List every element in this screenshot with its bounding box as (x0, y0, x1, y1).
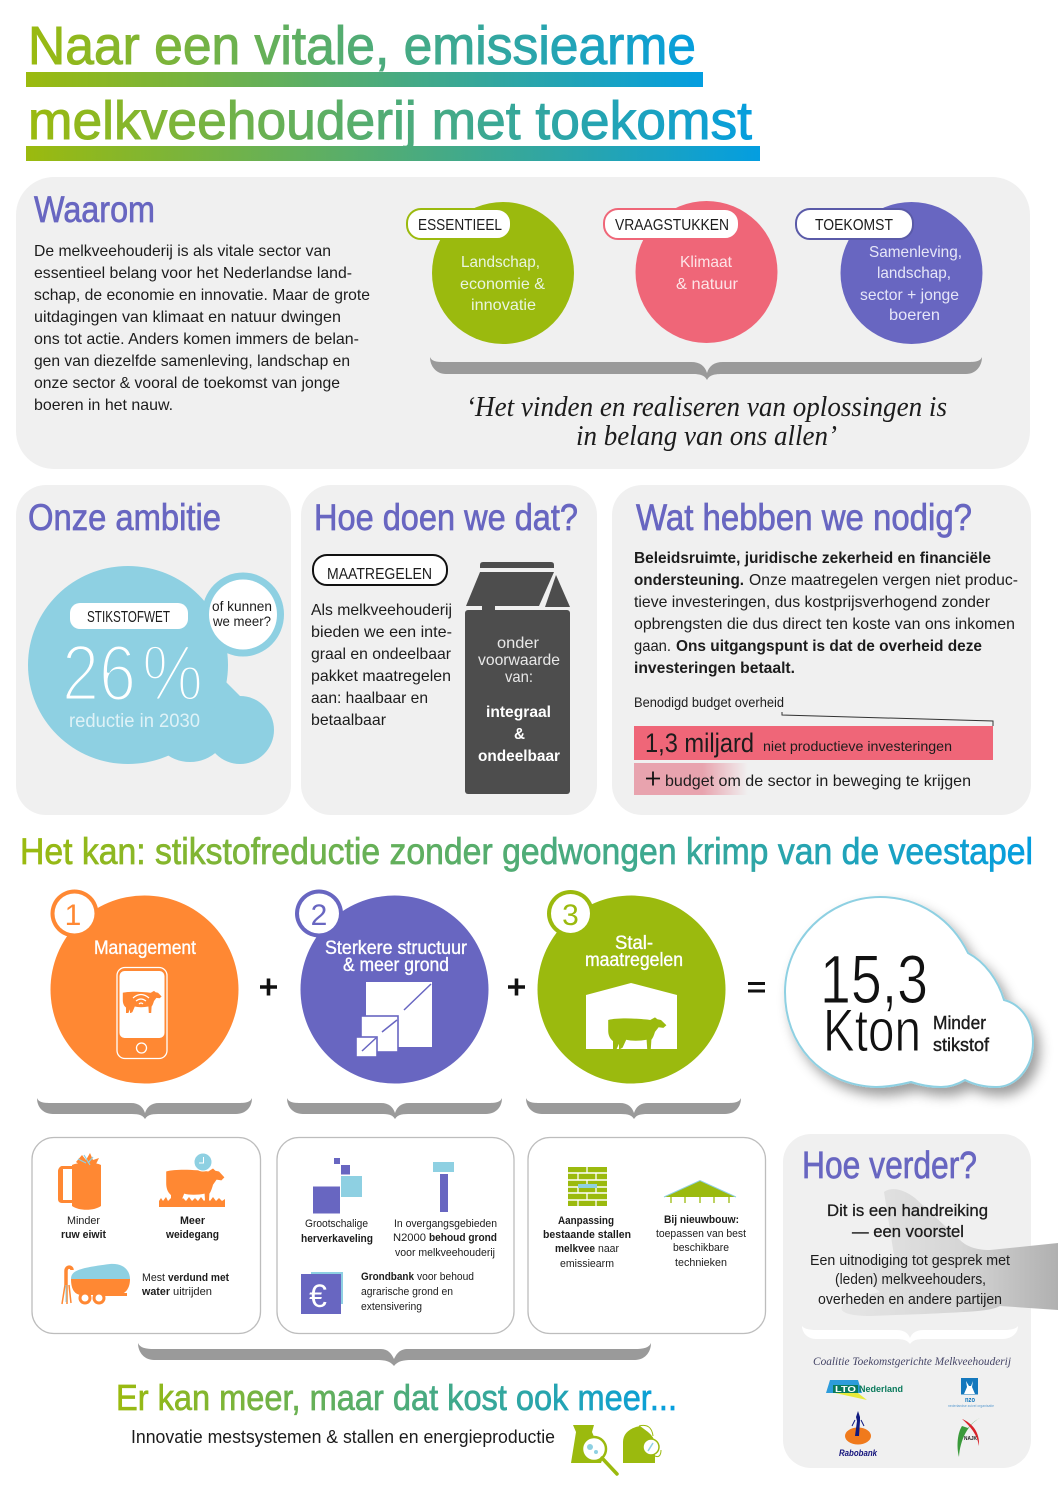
title line 2: melkveehouderij met toekomst (28, 91, 752, 151)
text block: hoe: bieden we een inte- (311, 624, 452, 641)
quote (466, 392, 947, 452)
callout: of kunnen we meer: of kunnen (212, 598, 272, 614)
text block: hoe: Als melkveehouderij (311, 602, 452, 619)
circle 2: sterkere structuur: Sterkere structuur (325, 938, 468, 959)
logo: najk: NAJK (964, 1436, 977, 1442)
icon: flask with magnifier (571, 1425, 617, 1474)
caption: nieuwbouw: beschikbare (673, 1242, 729, 1254)
circle: toekomst: landschap, (877, 265, 951, 282)
cloud: 15,3 kton: stikstof (933, 1035, 990, 1055)
heading: wat hebben we nodig: Wat hebben we nodig? (636, 497, 972, 538)
bar: 1,3 miljard: niet productieve investeringen (763, 738, 952, 754)
caption: herverkaveling: Grootschalige (305, 1218, 368, 1230)
text block: wat: opbrengsten die dus direct ten koste van ons inkomen (634, 616, 1015, 633)
caption: aanpassing: bestaande stallen (543, 1229, 631, 1241)
number: 26 percent (62, 628, 203, 717)
circle: toekomst: TOEKOMST (815, 217, 893, 234)
equals sign (748, 984, 765, 991)
brace: white (802, 1326, 1018, 1344)
caption: n2000: In overgangsgebieden (394, 1218, 497, 1230)
bar: 1,3 miljard (634, 726, 993, 760)
caption: grondbank: voor behoud (417, 1271, 474, 1283)
text block: wat: investeringen betaalt. (634, 660, 795, 677)
icon: milk carton: & (514, 726, 525, 743)
text block: handreiking: Een uitnodiging tot gesprek met (810, 1252, 1011, 1269)
caption: ruw eiwit (61, 1215, 106, 1241)
caption: nieuwbouw: Bij nieuwbouw: (664, 1214, 739, 1226)
logo: nzo: nzo (965, 1397, 975, 1404)
cloud: 15,3 kton: 15,3 (820, 941, 928, 1018)
caption: ruw eiwit: Minder (67, 1215, 100, 1227)
number: 26 percent: 26 (62, 628, 136, 717)
circle 2: sterkere structuur (295, 890, 488, 1084)
panel: structure measures (277, 1138, 514, 1334)
icon: milk carton (465, 562, 570, 794)
text block: waarom: gen van diezelfde samenleving, landschap en (34, 353, 350, 370)
circle 1: management: Management (94, 938, 197, 959)
circle: toekomst: Samenleving, (869, 244, 962, 261)
caption: mest verdund: uitrijden (173, 1286, 212, 1298)
text block: hoe (311, 602, 452, 729)
icon: phone with cow (117, 968, 167, 1058)
icon: new barn roof (664, 1180, 736, 1203)
icon: barn with cow (586, 983, 677, 1049)
caption: nieuwbouw (656, 1214, 746, 1269)
panel: stable measures (528, 1138, 766, 1334)
brace 1 (37, 1098, 252, 1119)
text block: hoe: aan: haalbaar en (311, 690, 428, 707)
heading: waarom: Waarom (34, 189, 155, 230)
badge 2 (295, 890, 343, 938)
text block: waarom: uitdagingen van klimaat en natuur dwingen (34, 309, 341, 326)
text block: wat (634, 550, 1018, 677)
text block: waarom: De melkveehouderij is als vitale sector van (34, 243, 331, 260)
circle 3: stalmaatregelen (538, 890, 726, 1084)
caption: aanpassing (543, 1215, 631, 1270)
badge 3 (547, 890, 594, 937)
logo: nzo: nederlandse zuivel organisatie (948, 1403, 995, 1408)
circle: toekomst: boeren (889, 307, 940, 324)
plus 2 (508, 978, 525, 996)
icon: milk carton: voorwaarde (478, 652, 560, 669)
connector line (782, 712, 993, 726)
icon: manure tank (62, 1264, 130, 1304)
icon: brick wall (568, 1167, 607, 1206)
logo: rabobank: Rabobank (839, 1448, 878, 1458)
bar: budget beweging: budget om de sector in beweging te krijgen (665, 773, 971, 790)
coalition caption: Coalitie Toekomstgerichte Melkveehouderij (813, 1354, 1012, 1368)
text block: wat: gaan. (634, 638, 671, 655)
label: maatregelen (313, 555, 447, 585)
caption: grondbank (361, 1271, 474, 1313)
text block: waarom: essentieel belang voor het Nederlandse land- (34, 265, 352, 282)
text block: wat: Ons uitgangspunt is dat de overheid deze (676, 638, 982, 655)
cloud: 15,3 kton (785, 897, 1033, 1087)
heading: er kan meer: Er kan meer, maar dat kost ook meer... (116, 1377, 677, 1418)
badge 3: 3 (562, 899, 579, 932)
brace 2 (287, 1098, 502, 1119)
circle: toekomst: sector + jonge (860, 287, 959, 304)
bar: budget beweging (634, 763, 971, 795)
circle: essentieel: innovatie (471, 297, 536, 314)
icon: square cluster (313, 1158, 362, 1214)
text block: waarom: ons tot actie. Anders komen immers de belan- (34, 331, 359, 348)
panel: waarom (16, 177, 1030, 469)
circle: vraagstukken: Klimaat (680, 254, 733, 271)
circle 3: stalmaatregelen: Stal- (615, 933, 653, 954)
logo: lto nederland (826, 1380, 903, 1400)
bar: 1,3 miljard: 1,3 miljard (645, 728, 754, 758)
panel: hoe verder (783, 1134, 1058, 1468)
caption: n2000: behoud grond (429, 1232, 497, 1244)
logo: lto nederland: Nederland (859, 1384, 903, 1394)
number: 26 percent: % (142, 628, 203, 717)
circle: toekomst (796, 202, 982, 344)
circle: essentieel: ESSENTIEEL (418, 217, 502, 234)
caption: mest verdund (141, 1272, 229, 1298)
cloud: 15,3 kton: Minder (933, 1013, 986, 1033)
icon: milk carton: integraal (486, 704, 551, 721)
circle 2: sterkere structuur: & meer grond (343, 955, 449, 976)
icon: digester with gauge (623, 1425, 661, 1463)
icon: mug (58, 1153, 101, 1210)
callout: of kunnen we meer: we meer? (212, 613, 271, 629)
caption: ruw eiwit: ruw eiwit (61, 1229, 106, 1241)
text block: handreiking: Dit is een handreiking (827, 1201, 988, 1220)
icon: euro: € (309, 1278, 327, 1314)
text block: hoe: betaalbaar (311, 712, 387, 729)
icon: growing squares (356, 982, 432, 1057)
cloud: 15,3 kton: Kton (823, 997, 921, 1064)
circle 1: management (50, 890, 238, 1084)
caption: mest verdund: verdund met (168, 1272, 229, 1284)
label: benodigd budget: Benodigd budget overheid (634, 694, 784, 710)
caption: herverkaveling: herverkaveling (301, 1233, 373, 1245)
logo: lto nederland: LTO (835, 1385, 856, 1394)
circle: essentieel: Landschap, (461, 254, 540, 271)
icon: reaching hand (841, 1189, 1058, 1316)
icon: milk carton: ondeelbaar (478, 748, 560, 765)
icon: cow in grass (159, 1153, 225, 1207)
badge 1 (50, 890, 98, 938)
caption: mest verdund: Mest (142, 1272, 165, 1284)
caption: nieuwbouw: technieken (675, 1257, 727, 1269)
caption: reductie: reductie in 2030 (69, 711, 200, 732)
circle: essentieel (407, 202, 574, 344)
caption: mest verdund: water (141, 1286, 171, 1298)
label: stikstofwet (70, 603, 188, 629)
text block: handreiking: overheden en andere partijen (818, 1291, 1002, 1308)
text block: wat: tieve investeringen, dus kostprijsverhogend zonder (634, 594, 991, 611)
badge 1: 1 (65, 899, 81, 932)
caption: weidegang: Meer (180, 1215, 206, 1227)
text block: wat: Onze maatregelen vergen niet produc- (749, 572, 1018, 589)
panel: hoe doen we dat (301, 485, 597, 815)
badge 2: 2 (311, 899, 327, 932)
caption: grondbank: extensivering (361, 1301, 422, 1313)
caption: grondbank: Grondbank (361, 1271, 415, 1283)
heading: onze ambitie: Onze ambitie (28, 497, 221, 538)
text block: waarom: onze sector & vooral de toekomst van jonge (34, 375, 340, 392)
title (26, 16, 760, 161)
logo: rabobank (839, 1411, 878, 1458)
icon: milk carton: van: (505, 669, 533, 686)
caption: aanpassing: Aanpassing (558, 1215, 614, 1227)
heading: hoe verder: Hoe verder? (802, 1145, 977, 1187)
caption: n2000: voor melkveehouderij (395, 1247, 495, 1259)
text block: hoe: pakket maatregelen (311, 668, 451, 685)
logo: nzo (948, 1378, 995, 1408)
label: stikstofwet: STIKSTOFWET (87, 609, 170, 626)
panel: onze ambitie (16, 485, 291, 815)
text block: handreiking (810, 1201, 1011, 1308)
text block: wat: Beleidsruimte, juridische zekerheid en financiële (634, 550, 991, 567)
icon: euro (301, 1272, 343, 1314)
circle: essentieel: economie & (460, 276, 545, 293)
circle: vraagstukken: & natuur (676, 276, 739, 293)
text block: waarom: schap, de economie en innovatie. Maar de grote (34, 287, 370, 304)
text block: waarom (34, 243, 370, 414)
brace 3 (526, 1098, 741, 1119)
text block: hoe: graal en ondeelbaar (311, 646, 452, 663)
caption: weidegang: weidegang (165, 1229, 219, 1241)
icon: milk carton: onder (497, 635, 540, 652)
brace: bottom (138, 1343, 651, 1366)
caption: nieuwbouw: toepassen van best (656, 1228, 746, 1240)
caption: aanpassing: emissiearm (560, 1258, 614, 1270)
caption: herverkaveling (301, 1218, 373, 1245)
icon: t-shape (433, 1162, 454, 1212)
caption: weidegang (165, 1215, 219, 1241)
caption: aanpassing: melkvee (555, 1243, 595, 1255)
panel: management measures (32, 1138, 260, 1334)
caption: aanpassing: naar (598, 1243, 619, 1255)
text block: wat: ondersteuning. (634, 572, 744, 589)
quote: ‘Het vinden en realiseren van oplossingen is (466, 392, 947, 423)
heading: hoe doen we dat: Hoe doen we dat? (314, 497, 578, 538)
text block: handreiking: — een voorstel (852, 1222, 964, 1241)
title line 1: Naar een vitale, emissiearme (28, 16, 696, 76)
blue blob (28, 566, 274, 764)
caption: n2000: N2000 (393, 1232, 426, 1244)
quote: in belang van ons allen’ (576, 421, 837, 452)
circle: vraagstukken: VRAAGSTUKKEN (615, 217, 729, 234)
text: innovatie: Innovatie mestsystemen & stallen en energieproductie (131, 1427, 555, 1447)
text block: handreiking: (leden) melkveehouders, (835, 1271, 986, 1288)
label: maatregelen: MAATREGELEN (327, 566, 432, 583)
brace: waarom (430, 357, 982, 380)
circle 3: stalmaatregelen: maatregelen (585, 950, 683, 971)
caption: n2000 (393, 1218, 497, 1259)
logo: najk (958, 1418, 980, 1457)
panel: wat hebben we nodig (612, 485, 1031, 815)
text block: waarom: boeren in het nauw. (34, 397, 173, 414)
circle: vraagstukken (604, 201, 778, 343)
callout: of kunnen we meer (202, 572, 284, 656)
caption: grondbank: agrarische grond en (361, 1286, 453, 1298)
plus 1 (260, 978, 277, 996)
